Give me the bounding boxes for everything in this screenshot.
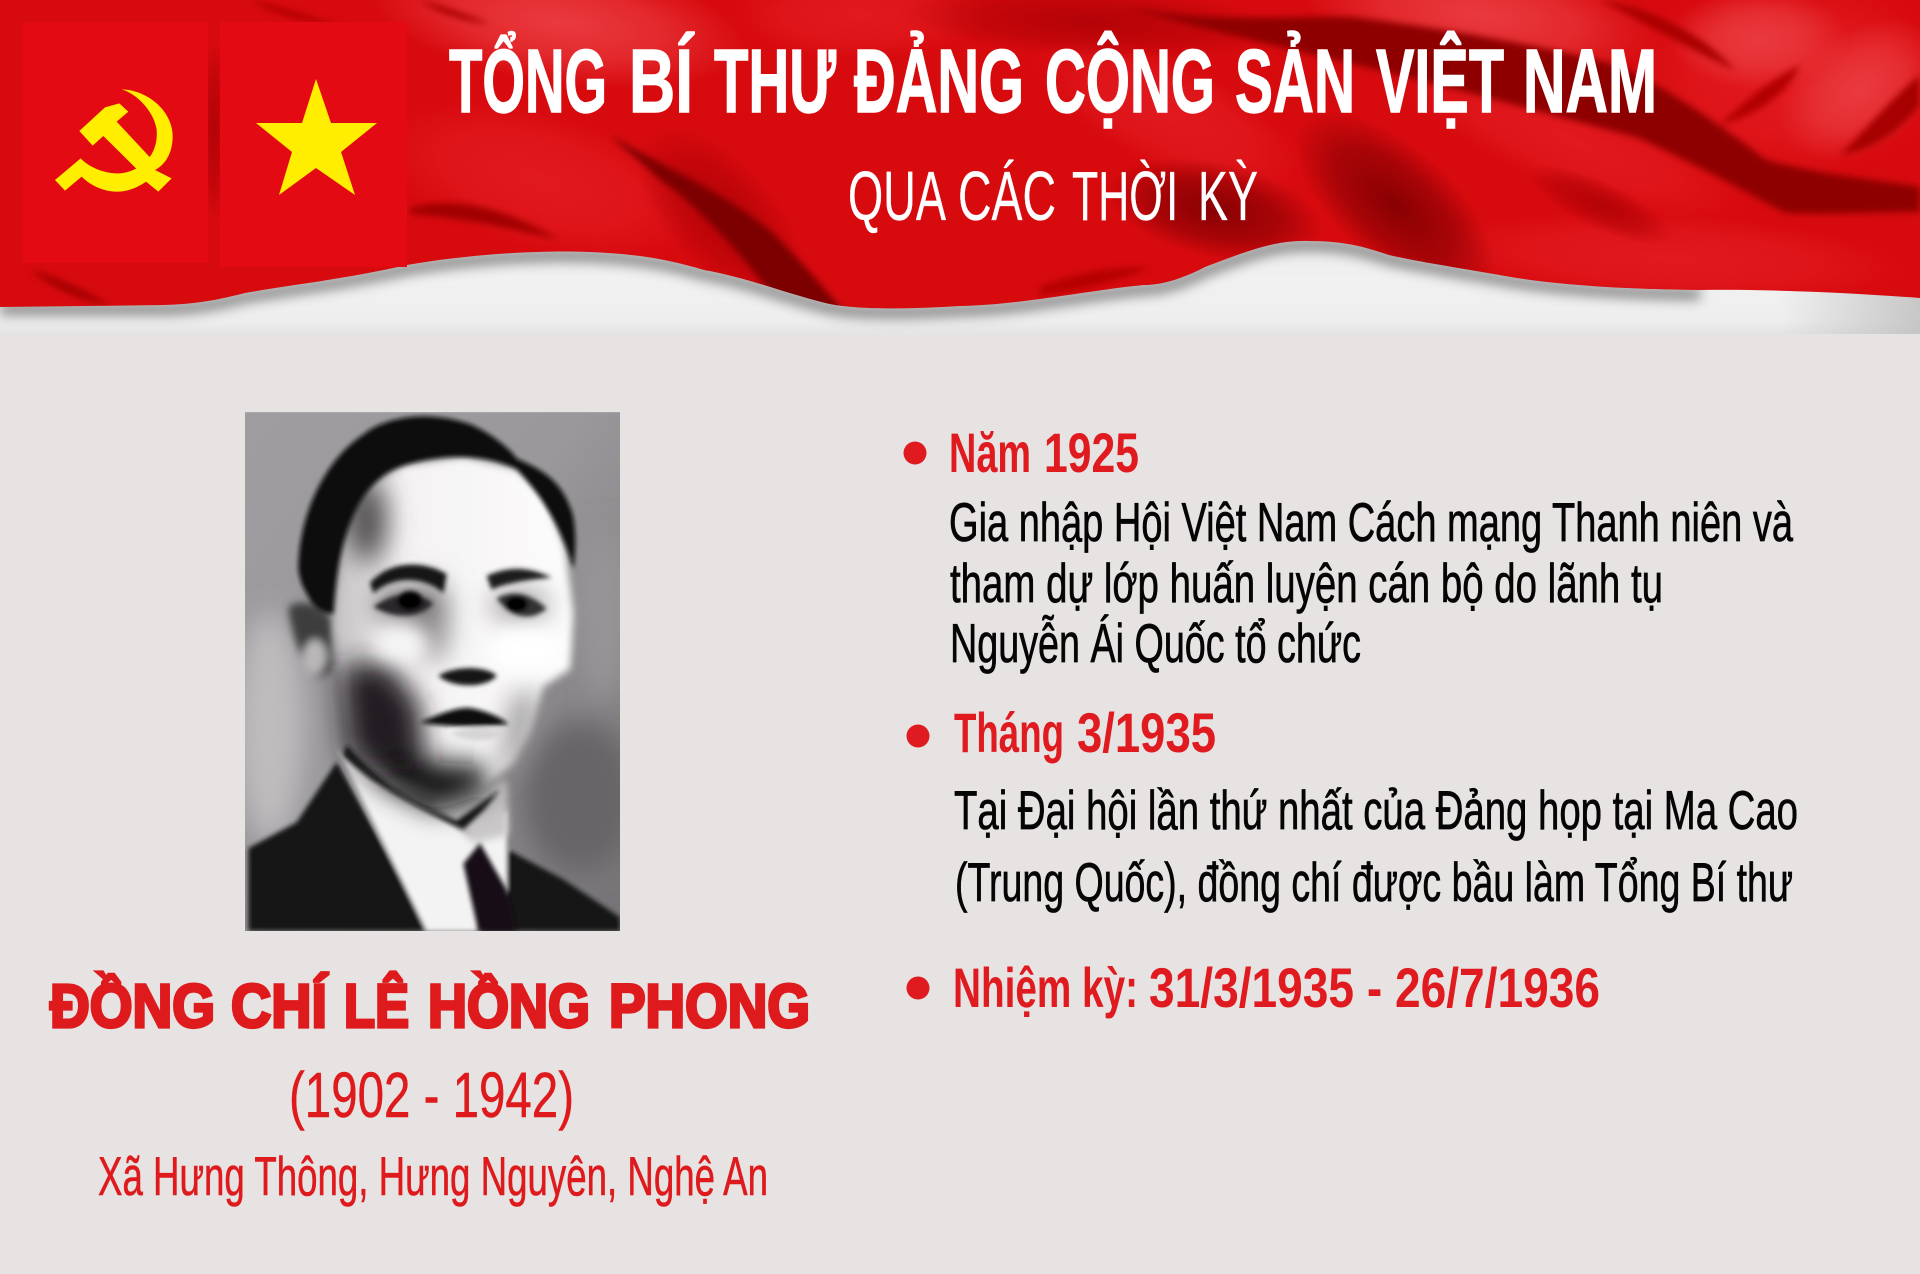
face shading — [347, 479, 387, 562]
soft shadows — [927, 0, 1234, 54]
name heading: CHÍ — [231, 972, 329, 1040]
term dates: 31/3/1935 - 26/7/1936 — [1149, 956, 1600, 1019]
date heading — [949, 421, 1139, 484]
name heading: ĐỒNG — [50, 972, 215, 1040]
eyebrows — [370, 565, 447, 593]
eyes — [373, 594, 433, 616]
red waving flag — [0, 0, 1920, 334]
panel: portrait and identity — [50, 412, 810, 1207]
panel: career timeline — [904, 421, 1798, 1019]
hair — [298, 416, 575, 614]
name heading: PHONG — [609, 972, 810, 1040]
subtitle — [848, 157, 1258, 235]
date heading: 1925 — [1044, 421, 1139, 484]
subtitle: QUA — [848, 157, 946, 235]
name heading: LÊ — [344, 972, 409, 1040]
hometown: Xã Hưng Thông, Hưng Nguyên, Nghệ An — [98, 1145, 768, 1207]
flag panel: gold star — [220, 22, 407, 267]
description — [949, 491, 1793, 674]
icon: yellow star — [256, 79, 377, 195]
face — [333, 457, 573, 800]
white band under flag — [0, 0, 1920, 334]
title: BÍ — [629, 31, 694, 132]
jaw shadow — [343, 745, 500, 829]
timeline item: term of office — [906, 956, 1600, 1019]
header banner — [0, 0, 1920, 334]
timeline item: 1925 — [904, 421, 1793, 674]
subtitle: CÁC — [958, 157, 1056, 235]
neck — [430, 779, 508, 843]
title: ĐẢNG — [854, 30, 1024, 132]
bullet — [904, 442, 926, 464]
left dark fold — [610, 135, 845, 312]
nose — [438, 668, 497, 685]
flag panel: hammer and sickle — [22, 22, 208, 263]
subtitle: THỜI — [1072, 157, 1178, 235]
subtitle: KỲ — [1198, 157, 1258, 235]
ear — [288, 603, 332, 678]
mouth — [420, 708, 508, 727]
title: NAM — [1523, 32, 1657, 132]
term dates — [953, 956, 1600, 1019]
title: VIỆT — [1376, 30, 1504, 132]
description: Nguyễn Ái Quốc tổ chức — [950, 612, 1361, 674]
portrait photo — [237, 412, 637, 931]
bullet — [906, 976, 930, 1000]
crease top right — [1600, 0, 1735, 70]
collar — [338, 750, 507, 931]
date heading: Tháng — [954, 701, 1064, 764]
title: SẢN — [1235, 30, 1355, 132]
suit — [248, 762, 430, 931]
bullet — [906, 724, 930, 748]
icon: hammer and sickle — [55, 89, 173, 192]
title — [449, 30, 1657, 132]
soft highlights — [394, 0, 726, 80]
description — [954, 779, 1798, 913]
title: CỘNG — [1045, 30, 1215, 132]
life dates: (1902 - 1942) — [289, 1059, 574, 1131]
timeline item: March 1935 — [906, 701, 1798, 913]
name heading — [50, 972, 810, 1040]
date heading — [954, 701, 1216, 764]
term dates: Nhiệm kỳ: — [953, 956, 1138, 1019]
tie — [463, 843, 517, 931]
upper dark fold — [1120, 5, 1920, 214]
name heading: HỒNG — [428, 972, 590, 1040]
title: TỔNG — [449, 30, 607, 132]
date heading: 3/1935 — [1077, 701, 1216, 764]
date heading: Năm — [949, 421, 1031, 484]
title: THƯ — [714, 32, 836, 132]
